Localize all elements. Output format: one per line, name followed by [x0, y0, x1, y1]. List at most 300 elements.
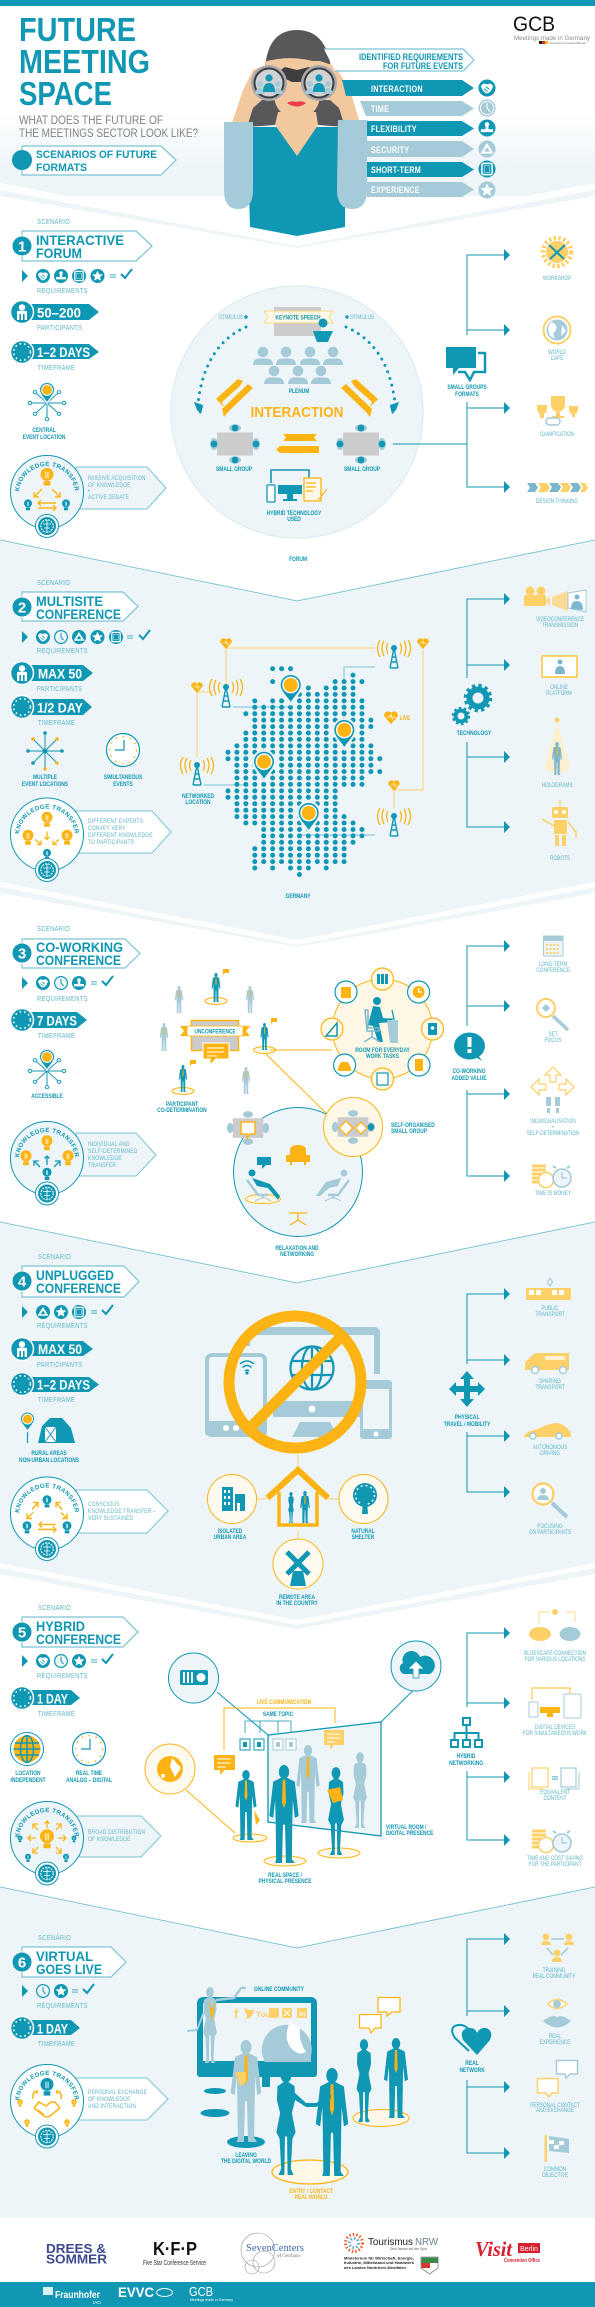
plenum audience — [253, 347, 343, 395]
icon: focusing on participants: FOCUSING — [537, 1524, 563, 1530]
knowledge transfer callout — [10, 2064, 169, 2148]
small group tables: SMALL GROUP — [344, 467, 380, 473]
heading tag: scenarios of future formats: FORMATS — [36, 162, 87, 174]
remote area windmill: IN THE COUNTRY — [276, 1601, 318, 1607]
icon: training real community: REAL COMMUNITY — [533, 1974, 576, 1980]
title: MEETING — [19, 43, 150, 80]
icon: network tree: NETWORKING — [449, 1761, 484, 1767]
icon: time and cost saving — [527, 1831, 583, 1868]
scenario label: SCENARIO — [38, 1604, 71, 1612]
panel: scenario 5 hybrid conference sidebar — [10, 1604, 162, 1886]
logo: GCB white — [189, 2284, 233, 2302]
title tag — [12, 939, 140, 968]
icon: wifi — [240, 1361, 254, 1374]
icon: phone — [360, 1380, 392, 1439]
knowledge transfer callout — [10, 1476, 169, 1561]
handshake pair on real-world platform: ENTRY / CONTACT — [289, 2189, 334, 2195]
requirements heading tag — [324, 49, 474, 71]
icon: sharing transport: SHARING — [539, 1379, 561, 1385]
logo: EVVC — [118, 2285, 172, 2300]
participants badge: MAX 50 — [38, 666, 82, 682]
live hearts: LIVE — [400, 716, 411, 722]
icon ring — [321, 968, 444, 1090]
link lines and live communication brackets: LIVE COMMUNICATION — [257, 1700, 311, 1706]
technology connectors — [453, 593, 510, 833]
icon: holograms: HOLOGRAMS — [542, 783, 573, 789]
unconference banner — [180, 1020, 250, 1065]
projector circle — [168, 1653, 218, 1703]
icon: world cafe: WORLD — [548, 350, 566, 356]
icon: sharing transport: TRANSPORT — [535, 1385, 565, 1391]
title tag: MULTISITE — [36, 593, 103, 609]
self-organised small group circle: SELF-ORGANISED — [391, 1123, 435, 1129]
knowledge transfer callout: • — [88, 488, 90, 495]
knowledge transfer callout — [10, 1801, 162, 1886]
title tag — [12, 592, 138, 622]
speech bubbles — [214, 1730, 344, 1775]
stimulus labels and dotted arrows: STIMULUS — [219, 315, 243, 321]
icon: flag: OBJECTIVE — [542, 2173, 569, 2179]
requirements row — [22, 1654, 113, 1680]
handshake pair on real-world platform — [272, 2068, 348, 2201]
social media icons: f — [234, 2006, 239, 2021]
natural shelter: NATURAL — [351, 1529, 375, 1535]
hybrid technology icon: HYBRID TECHNOLOGY — [267, 511, 322, 517]
icon: time is money: TIME IS MONEY — [535, 1191, 571, 1197]
participants badge: PARTICIPANTS — [37, 324, 83, 332]
icon: exclamation bubble: CO-WORKING — [452, 1069, 486, 1075]
knowledge transfer callout: KNOWLEDGE TRANSFER — [14, 1483, 79, 1513]
man leaving the digital world: THE DIGITAL WORLD — [221, 2159, 271, 2165]
knowledge transfer callout: OF KNOWLEDGE — [88, 1836, 131, 1843]
location pins — [253, 674, 355, 832]
logo: Fraunhofer: IAO — [93, 2300, 101, 2305]
bar: flexibility — [367, 119, 496, 137]
requirements row: REQUIREMENTS — [37, 287, 88, 295]
knowledge transfer callout: VERY SUSTAINED — [88, 1515, 133, 1522]
link lines and live communication brackets — [186, 1690, 414, 1833]
panel: unplugged devices with prohibition sign — [205, 1316, 392, 1607]
icon: robots — [542, 800, 576, 862]
icon: online platform — [542, 656, 577, 697]
title tag: FORUM — [36, 245, 82, 261]
icon: digital devices: FOR SIMULTANEOUS WORK — [523, 1731, 587, 1737]
logo: Seven Centers — [241, 2233, 304, 2274]
people: real and virtual — [233, 1745, 434, 1885]
small group tables: SMALL GROUP — [216, 467, 252, 473]
bar: short-term — [367, 160, 496, 178]
title tag: 2 — [18, 600, 26, 616]
bar: interaction: INTERACTION — [371, 83, 423, 94]
icon: world cafe: CAFE — [551, 356, 564, 362]
stimulus labels and dotted arrows — [194, 315, 399, 414]
requirements row: REQUIREMENTS — [37, 647, 88, 655]
handshake pair on real-world platform: REAL WORLD — [294, 2195, 328, 2201]
bar: security: SECURITY — [371, 144, 409, 155]
icon: network tree: HYBRID — [457, 1754, 475, 1760]
icon: long-term conference calendar: LONG-TERM — [539, 962, 568, 968]
panel: scenario 4 unplugged conference sidebar — [10, 1253, 169, 1561]
icon: woman at laptop — [364, 997, 398, 1043]
icon: training real community: TRAINING — [543, 1968, 565, 1974]
icon: autonomous driving — [524, 1423, 571, 1457]
requirements row — [22, 1984, 94, 2010]
title tag — [12, 1947, 126, 1977]
knowledge transfer callout: AND INTERACTION — [88, 2103, 136, 2110]
icon: four-way arrows — [444, 1371, 491, 1428]
icon: rural areas pin and barn: RURAL AREAS — [31, 1451, 67, 1457]
icon: accessible location — [28, 1049, 66, 1100]
timeframe badge — [10, 2016, 80, 2048]
connector lines — [266, 1050, 332, 1113]
knowledge transfer callout: INDIVIDUAL AND — [88, 1141, 130, 1148]
hybrid technology icon — [267, 470, 327, 523]
knowledge transfer callout: KNOWLEDGE TRANSFER — [14, 804, 79, 834]
forum caption: FORUM — [289, 557, 307, 563]
natural shelter: SHELTER — [352, 1535, 374, 1541]
icon: bluescape connection — [524, 1609, 586, 1663]
icon: digital devices: DIGITAL DEVICES — [535, 1725, 575, 1731]
interaction heading with arrows — [216, 379, 378, 453]
GCB logo — [513, 13, 591, 45]
co-working added value connectors — [452, 940, 510, 1182]
footer logos strip — [46, 2233, 540, 2274]
logo: Fraunhofer — [43, 2287, 101, 2305]
icon: location independent globe — [10, 1732, 46, 1784]
icon: workshop — [543, 238, 571, 282]
logo: GCB white: Meetings made in Germany — [190, 2298, 233, 2302]
bar: interaction — [342, 79, 496, 97]
subtitle question: WHAT DOES THE FUTURE OF — [19, 113, 163, 127]
icon: equivalent content — [529, 1768, 579, 1802]
icon: eye and lips — [540, 2000, 571, 2046]
title tag — [12, 1617, 138, 1647]
participants: CO-DETERMINATION — [157, 1108, 207, 1114]
requirements row: REQUIREMENTS — [37, 1322, 88, 1330]
icon: online platform: PLATFORM — [546, 691, 572, 697]
timeframe badge — [10, 1008, 87, 1040]
icon: real time clock: ANALOG – DIGITAL — [66, 1778, 112, 1784]
title tag: HYBRID — [36, 1618, 85, 1634]
subtitle question — [19, 113, 198, 140]
icon: holograms — [542, 718, 573, 789]
logo: Visit Berlin — [475, 2237, 540, 2264]
keynote speech — [264, 307, 333, 342]
logo: Visit Berlin: Visit — [475, 2237, 513, 2261]
people: real and virtual: VIRTUAL ROOM / — [386, 1825, 427, 1831]
timeframe badge: 1–2 DAYS — [37, 1376, 90, 1392]
bar: short-term: SHORT-TERM — [371, 164, 421, 175]
icon: eye and lips: EXPERIENCE — [540, 2040, 571, 2046]
cloud upload circle — [391, 1641, 441, 1691]
bar: flexibility: FLEXIBILITY — [371, 123, 417, 134]
icon: gamification — [537, 396, 578, 438]
top teal band — [0, 0, 595, 6]
logo: EVVC: EVVC — [118, 2285, 154, 2300]
icon: tablet — [205, 1355, 267, 1436]
link lines and live communication brackets: SAME TOPIC — [263, 1712, 293, 1718]
self-organised small group circle — [324, 1098, 435, 1156]
icon: individualisation arrows and footsteps — [527, 1067, 579, 1137]
side table — [289, 1213, 307, 1225]
participants badge: MAX 50 — [38, 1341, 82, 1357]
logo: Tourismus NRW: des Landes Nordrhein-Westfalen — [344, 2266, 406, 2270]
title tag: CONFERENCE — [36, 1280, 121, 1296]
bar: experience: EXPERIENCE — [371, 184, 420, 195]
participants badge — [10, 662, 93, 693]
requirements row — [22, 976, 113, 1003]
icon: exclamation bubble: ADDED VALUE — [452, 1076, 487, 1082]
icon: chat bubbles — [446, 347, 487, 398]
icon: design thinking chevrons: DESIGN THINKING — [536, 499, 578, 505]
stimulus labels and dotted arrows: STIMULUS — [350, 315, 374, 321]
panel: scenario 1 interactive forum sidebar — [10, 218, 166, 538]
icon: accessible location: ACCESSIBLE — [31, 1094, 63, 1100]
online community presenter — [187, 1987, 304, 2063]
requirements row: REQUIREMENTS — [37, 1672, 88, 1680]
timeframe badge: TIMEFRAME — [38, 2040, 75, 2048]
requirements heading tag: FOR FUTURE EVENTS — [383, 61, 463, 71]
icon: rural areas pin and barn — [19, 1412, 79, 1464]
logo: Drees & Sommer: DREES & — [46, 2241, 106, 2256]
prohibition sign — [229, 1316, 361, 1448]
logo: Tourismus NRW: NRW — [415, 2237, 439, 2248]
icon: gears: TECHNOLOGY — [457, 731, 491, 737]
icon: central event location — [23, 382, 66, 441]
panel: virtual goes live scene — [187, 1987, 409, 2201]
title tag: UNPLUGGED — [36, 1267, 114, 1283]
requirements row — [22, 269, 132, 295]
timeframe badge — [10, 696, 92, 727]
scenario label: SCENARIO — [38, 1253, 71, 1261]
timeframe badge: TIMEFRAME — [38, 719, 75, 727]
people: real and virtual: REAL SPACE / — [268, 1873, 302, 1879]
icon: design thinking chevrons — [527, 483, 588, 505]
icon: monitor — [244, 1327, 380, 1437]
icon: autonomous driving: DRIVING — [540, 1451, 560, 1457]
remote area windmill: REMOTE AREA — [279, 1595, 315, 1601]
knowledge transfer callout: KNOWLEDGE TRANSFER — [14, 462, 79, 492]
timeframe badge: TIMEFRAME — [38, 1710, 75, 1718]
icon: location independent globe: INDEPENDENT — [11, 1778, 46, 1784]
knowledge transfer callout: CONVEY VERY — [88, 825, 126, 832]
keynote speech: KEYNOTE SPEECH — [275, 315, 321, 322]
title tag: CONFERENCE — [36, 952, 121, 968]
title tag — [12, 231, 152, 261]
knowledge transfer callout: KNOWLEDGE TRANSFER — [14, 1128, 79, 1158]
timeframe badge: 1–2 DAYS — [37, 344, 90, 360]
icon: rural areas pin and barn: NON-URBAN LOCATIONS — [19, 1458, 79, 1464]
back pair on platform — [353, 2038, 409, 2126]
map: Germany dot grid — [180, 638, 429, 900]
participants: PARTICIPANT — [166, 1102, 199, 1108]
knowledge transfer callout: KNOWLEDGE TRANSFER — [14, 1808, 79, 1837]
bar: security — [362, 140, 496, 158]
timeframe badge: TIMEFRAME — [38, 1396, 75, 1404]
participants badge: PARTICIPANTS — [37, 685, 83, 693]
icon: flag: COMMON — [544, 2167, 566, 2173]
panel: relaxation and networking: RELAXATION AND — [275, 1246, 319, 1252]
icon: time is money — [532, 1166, 571, 1197]
knowledge transfer callout: KNOWLEDGE — [88, 1155, 122, 1162]
requirements row: REQUIREMENTS — [37, 995, 88, 1003]
heading tag: scenarios of future formats — [12, 146, 176, 175]
icon: public transport — [526, 1278, 571, 1318]
natural shelter — [339, 1474, 388, 1541]
physical travel connectors — [444, 1288, 510, 1498]
title: SPACE — [19, 75, 112, 112]
logo: Visit Berlin: Convention Office — [504, 2258, 540, 2264]
illustration: woman with binoculars — [224, 30, 367, 236]
isolated urban area — [208, 1474, 256, 1541]
participants badge — [10, 1338, 93, 1369]
icon: public transport: PUBLIC — [541, 1306, 559, 1312]
knowledge transfer callout: BROAD DISTRIBUTION — [88, 1829, 145, 1836]
icon: set focus magnifier: SET — [548, 1032, 558, 1038]
icon: four-way arrows: PHYSICAL — [455, 1415, 480, 1421]
icon: time and cost saving: FOR THE PARTICIPANT — [529, 1862, 582, 1868]
social media icons: You — [256, 2010, 271, 2019]
icon: personal contact bubbles — [530, 2060, 580, 2114]
social media icons: in — [299, 2012, 305, 2018]
logo: Tourismus NRW: Industrie, Mittelstand und Handwerk — [344, 2261, 414, 2265]
logo: Seven Centers: SevenCenters — [246, 2243, 304, 2254]
title tag: 4 — [18, 1274, 27, 1290]
icon: public transport: TRANSPORT — [535, 1312, 565, 1318]
relaxing person light — [316, 1170, 349, 1201]
heading tag: scenarios of future formats: SCENARIOS OF FUTURE — [36, 149, 157, 161]
panel: room for everyday work tasks: WORK TASKS — [366, 1054, 399, 1060]
bar: experience — [367, 181, 496, 199]
scenario label: SCENARIO — [38, 1934, 71, 1942]
man leaving the digital world: LEAVING — [235, 2153, 257, 2159]
title tag: 3 — [18, 946, 26, 962]
icon: equivalent content: EQUIVALENT — [540, 1790, 571, 1796]
social media icons — [234, 2006, 307, 2021]
icon: location independent globe: LOCATION — [15, 1771, 41, 1777]
panel: hybrid real and virtual space — [145, 1641, 441, 1885]
title tag: VIRTUAL — [36, 1948, 93, 1964]
icon: bluescape connection: BLUESCAPE CONNECTION — [524, 1651, 586, 1657]
relaxing person with bubble — [246, 1157, 280, 1204]
house with people — [257, 1453, 339, 1540]
hybrid networking connectors — [449, 1627, 510, 1846]
logo: Tourismus NRW: Ministerium für Wirtschaft, Energie, — [344, 2256, 414, 2260]
timeframe badge: 1 DAY — [37, 1690, 69, 1706]
requirement bars — [342, 79, 496, 199]
timeframe badge: TIMEFRAME — [38, 364, 75, 372]
live hearts — [191, 638, 429, 791]
requirements heading tag: IDENTIFIED REQUIREMENTS — [359, 52, 463, 62]
icon: central event location: CENTRAL — [32, 428, 56, 434]
title: FUTURE — [19, 11, 136, 48]
document icons — [240, 1739, 296, 1750]
logo: K.F.P — [143, 2239, 206, 2267]
knowledge transfer callout: PASSIVE ACQUISITION — [88, 475, 146, 482]
icon: multiple event locations: MULTIPLE — [33, 775, 57, 781]
icon: simultaneous events clock: SIMULTANEOUS — [104, 775, 142, 781]
panel: room for everyday work tasks: ROOM FOR EVERYDAY — [355, 1048, 410, 1054]
title tag — [12, 1266, 139, 1297]
icon: real time clock — [66, 1732, 112, 1784]
icon: long-term conference calendar — [536, 936, 570, 974]
logo: Fraunhofer: Fraunhofer — [55, 2289, 100, 2301]
isolated urban area: ISOLATED — [218, 1529, 242, 1535]
knowledge transfer callout — [10, 1121, 157, 1206]
timeframe badge — [10, 340, 99, 372]
monitor — [197, 2000, 317, 2087]
knowledge transfer callout: OF KNOWLEDGE — [88, 482, 131, 489]
panel: unconference participants — [157, 968, 444, 1258]
icon: central event location: EVENT LOCATION — [23, 435, 65, 441]
knowledge transfer callout: SELF-DETERMINED — [88, 1148, 138, 1155]
globe in monitor — [262, 2022, 312, 2062]
icon: network tree — [449, 1718, 484, 1767]
timeframe badge: 1/2 DAY — [37, 700, 84, 716]
icon: individualisation arrows and footsteps: SELF-DETERMINATION — [527, 1131, 579, 1137]
knowledge transfer callout: ACTIVE DEBATE — [88, 494, 129, 501]
people: real and virtual: PHYSICAL PRESENCE — [259, 1879, 312, 1885]
knowledge transfer callout: CONSCIOUS — [88, 1501, 120, 1508]
participants badge: 50–200 — [37, 304, 81, 320]
icon: robots: ROBOTS — [550, 856, 570, 862]
knowledge transfer callout: OF KNOWLEDGE — [88, 2096, 131, 2103]
logo: Drees & Sommer — [46, 2241, 108, 2266]
hybrid technology icon: USED — [287, 517, 301, 523]
logo: Tourismus NRW — [344, 2234, 439, 2274]
panel: room for everyday work tasks — [321, 968, 444, 1090]
icon: multiple event locations: EVENT LOCATIONS — [22, 782, 68, 788]
icon: hearts — [452, 2025, 491, 2074]
icon: personal contact bubbles: PERSONAL CONTACT — [530, 2103, 580, 2109]
GCB logo: Meetings made in Germany — [514, 35, 591, 42]
icon: globe — [290, 1346, 334, 1390]
icon: hearts: REAL — [465, 2061, 479, 2067]
icon: videoconference transmission — [524, 586, 586, 629]
knowledge transfer callout: TO PARTICIPANTS — [88, 839, 134, 846]
man leaving the digital world — [221, 2040, 271, 2165]
icon: time and cost saving: TIME AND COST SAVING — [527, 1856, 583, 1862]
icon: flag — [542, 2135, 569, 2179]
requirements row: REQUIREMENTS — [37, 2002, 88, 2010]
requirements row — [22, 630, 150, 655]
icon: equivalent content: CONTENT — [544, 1796, 567, 1802]
scenario label: SCENARIO — [37, 218, 70, 226]
participants — [157, 969, 277, 1114]
logo: Tourismus NRW: Dem Neuen auf der Spur — [390, 2246, 428, 2251]
panel: scenario 3 co-working conference sidebar — [10, 925, 157, 1206]
virtual room screen — [268, 1722, 381, 1836]
logo: Tourismus NRW: Tourismus — [368, 2237, 413, 2248]
globe circle — [145, 1744, 195, 1794]
title tag: 5 — [18, 1624, 26, 1642]
icon: multiple event locations — [22, 731, 68, 788]
knowledge transfer callout — [10, 455, 166, 538]
timeframe badge: TIMEFRAME — [38, 1032, 75, 1040]
title tag: CO-WORKING — [36, 939, 123, 955]
scenario label: SCENARIO — [37, 579, 70, 587]
title — [19, 11, 150, 112]
icon: eye and lips: REAL — [549, 2034, 561, 2040]
speech bubbles outline — [360, 1998, 400, 2033]
icon: simultaneous events clock — [104, 734, 142, 788]
icon: personal contact bubbles: AND EXCHANGE — [536, 2108, 574, 2114]
networked towers: NETWORKED — [182, 794, 214, 800]
logo: K.F.P: Five Star Conference Service — [143, 2260, 206, 2267]
interaction heading with arrows: INTERACTION — [250, 404, 344, 421]
small groups formats connectors — [393, 249, 510, 493]
requirements row — [22, 1305, 113, 1330]
